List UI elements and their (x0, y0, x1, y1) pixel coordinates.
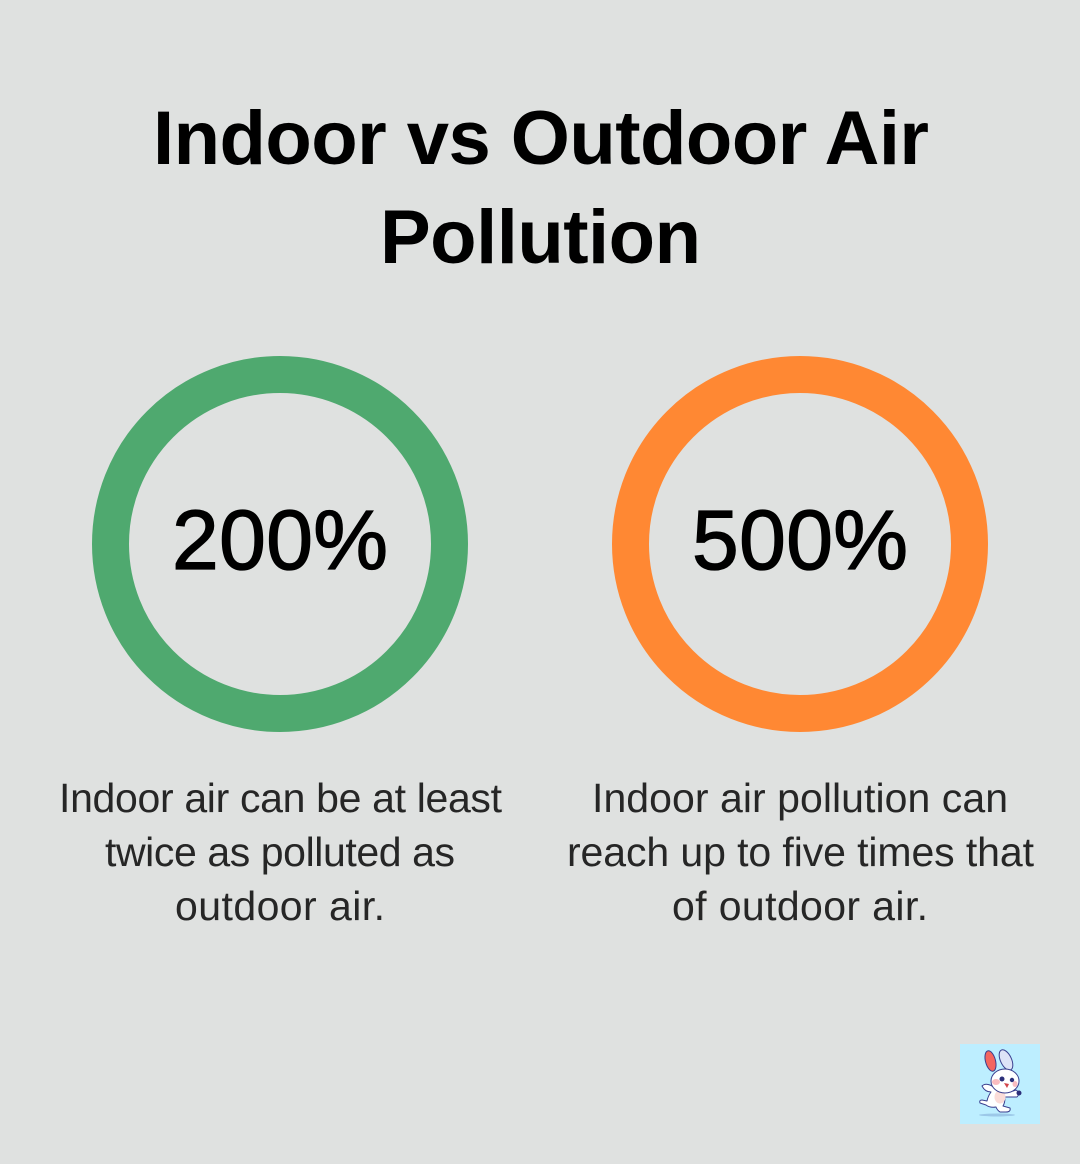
description: five times: reach up to five times that (567, 829, 1035, 875)
description: twice as polluted: twice as polluted as (105, 829, 455, 875)
description: five times: of outdoor air. (672, 883, 928, 929)
panel: 500% statistic (567, 374, 1035, 929)
description: twice as polluted: outdoor air. (175, 883, 385, 929)
description: five times: Indoor air pollution can (592, 775, 1008, 821)
value: 500%: 500% (692, 493, 908, 587)
description: five times (567, 775, 1035, 929)
title (153, 96, 929, 280)
value: 200%: 200% (172, 493, 388, 587)
description: twice as polluted (59, 775, 503, 929)
icon: rabbit logo (960, 1044, 1040, 1124)
title: Indoor vs Outdoor Air (153, 96, 929, 181)
panel: 200% statistic (59, 374, 503, 929)
green ring (110, 374, 450, 714)
description: twice as polluted: Indoor air can be at least (59, 775, 503, 821)
title: Pollution (380, 195, 701, 280)
orange ring (630, 374, 970, 714)
